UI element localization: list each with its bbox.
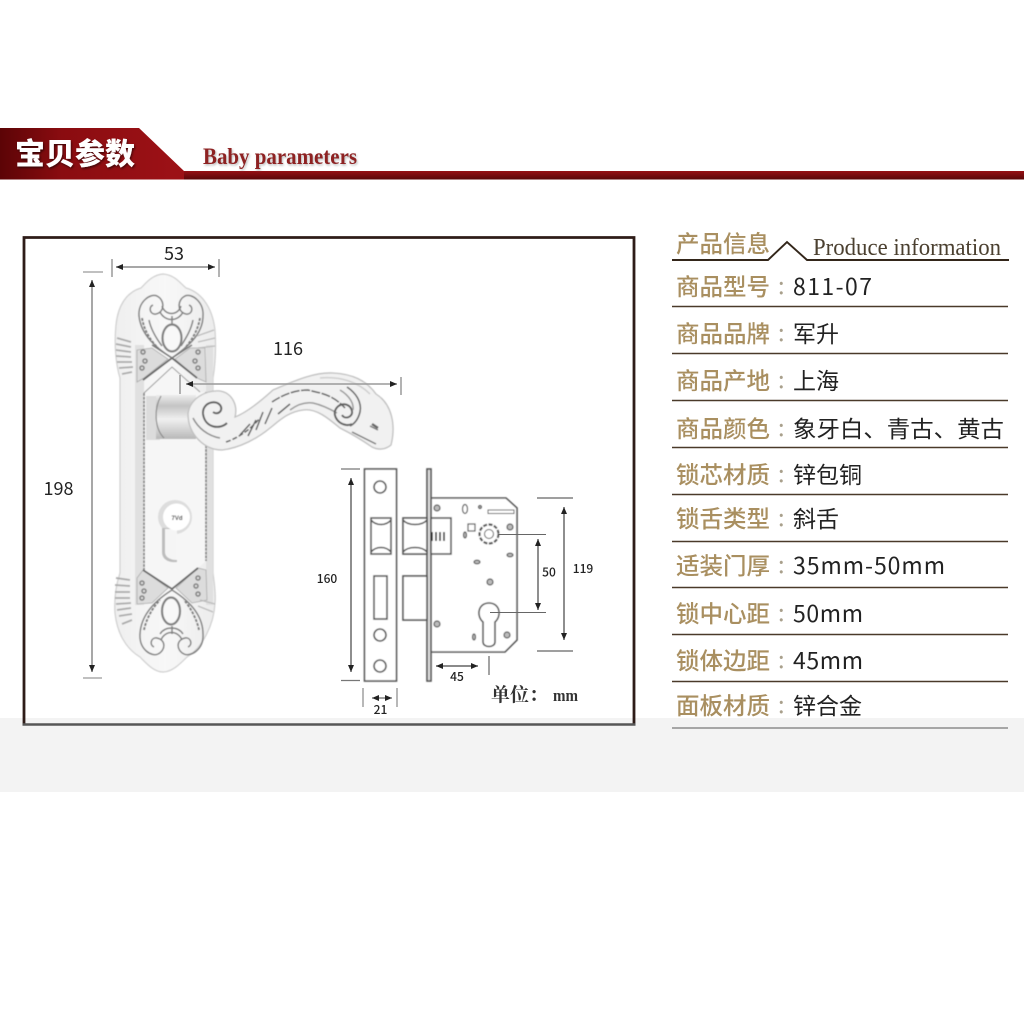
banner lower stripe	[184, 171, 1024, 180]
dimension: handle length 116: 116	[273, 335, 303, 361]
row: panel material: :	[778, 686, 785, 720]
grey background band	[0, 718, 1024, 792]
banner subtitle: Baby parameters	[203, 144, 357, 169]
row: model	[672, 267, 1008, 306]
dimension: backset 45: 45	[450, 668, 464, 685]
dimension: height 198	[44, 272, 103, 678]
dimension: plate width 21	[363, 688, 397, 718]
row: door thickness: :	[778, 546, 785, 580]
row: panel material: 面板材质	[676, 687, 770, 721]
upper heart ornament	[116, 295, 215, 380]
row: latch type: 斜舌	[793, 500, 839, 534]
dimension: case height 119	[537, 498, 593, 651]
banner title: 宝贝参数	[15, 130, 135, 174]
row: origin: 上海	[793, 362, 839, 396]
lock body diagram	[364, 469, 517, 681]
strike plate	[364, 469, 396, 681]
mortise case	[403, 469, 517, 681]
row: door thickness: 适装门厚	[676, 547, 770, 581]
dimension: centre distance 50: 50	[542, 564, 556, 580]
table heading	[672, 225, 1009, 261]
dimension: case height 119: 119	[573, 560, 593, 577]
row: panel material: 锌合金	[793, 687, 862, 721]
row: panel material	[672, 686, 1008, 728]
side rails	[135, 345, 213, 605]
centre panel	[143, 367, 206, 588]
row: brand	[672, 314, 1008, 354]
lower wings	[137, 568, 207, 604]
row: brand: 军升	[793, 315, 839, 349]
row: origin: :	[778, 361, 785, 395]
door handle drawing	[115, 274, 393, 672]
dimension: handle length 116	[180, 335, 401, 395]
row: centre distance: :	[778, 594, 785, 628]
header banner	[0, 128, 1024, 180]
row: door thickness	[672, 546, 1008, 588]
row: brand: 商品品牌	[676, 315, 770, 349]
row: model: :	[778, 267, 785, 301]
row: origin: 商品产地	[676, 362, 770, 396]
row: cylinder material: :	[778, 455, 785, 489]
dimension: height 198: 198	[44, 475, 73, 501]
row: cylinder material: 锁芯材质	[676, 456, 770, 490]
dimension: width 53: 53	[164, 240, 184, 266]
row: model: 商品型号	[676, 268, 770, 302]
icon: handle rose	[146, 395, 196, 440]
row: door thickness: 35mm-50mm	[793, 547, 945, 581]
row: backset: 锁体边距	[676, 642, 770, 676]
row: colour: 象牙白、青古、黄古	[793, 410, 1004, 444]
lower heart ornament	[115, 568, 215, 655]
row: centre distance: 50mm	[793, 595, 863, 629]
panel: drawing frame	[22, 238, 636, 724]
row: backset: :	[778, 641, 785, 675]
panel: product information	[672, 225, 1009, 728]
row: centre distance: 锁中心距	[676, 595, 770, 629]
banner shape	[0, 128, 1024, 180]
table heading: Produce information	[813, 235, 1001, 261]
dimension: width 53	[112, 240, 219, 277]
icon: lever handle	[188, 373, 393, 450]
table heading: 产品信息	[676, 225, 770, 259]
row: backset: 45mm	[793, 642, 863, 676]
upper wings	[137, 348, 206, 382]
row: centre distance	[672, 594, 1008, 634]
row: cylinder material	[672, 455, 1008, 494]
row: latch type: :	[778, 499, 785, 533]
row: colour: :	[778, 409, 785, 443]
row: origin	[672, 361, 1008, 400]
unit note: 单位：	[491, 685, 548, 706]
dimension: strike plate 160: 160	[317, 570, 337, 587]
icon: keyhole: 7Vd	[171, 516, 183, 522]
row: cylinder material: 锌包铜	[793, 456, 862, 490]
dimension: centre distance 50	[490, 534, 556, 612]
row: latch type	[672, 499, 1008, 542]
dimension: strike plate 160	[317, 469, 360, 680]
dimension: backset 45	[436, 656, 489, 685]
row: model: 811-07	[793, 268, 872, 302]
screws	[434, 504, 513, 640]
row: backset	[672, 641, 1008, 682]
dimension: plate width 21: 21	[374, 701, 387, 718]
row: colour: 商品颜色	[676, 410, 770, 444]
icon: keyhole	[158, 500, 192, 562]
unit note: mm	[553, 686, 578, 705]
icon: backplate	[115, 274, 216, 672]
row: colour	[672, 409, 1008, 448]
row: brand: :	[778, 314, 785, 348]
row: latch type: 锁舌类型	[676, 500, 770, 534]
